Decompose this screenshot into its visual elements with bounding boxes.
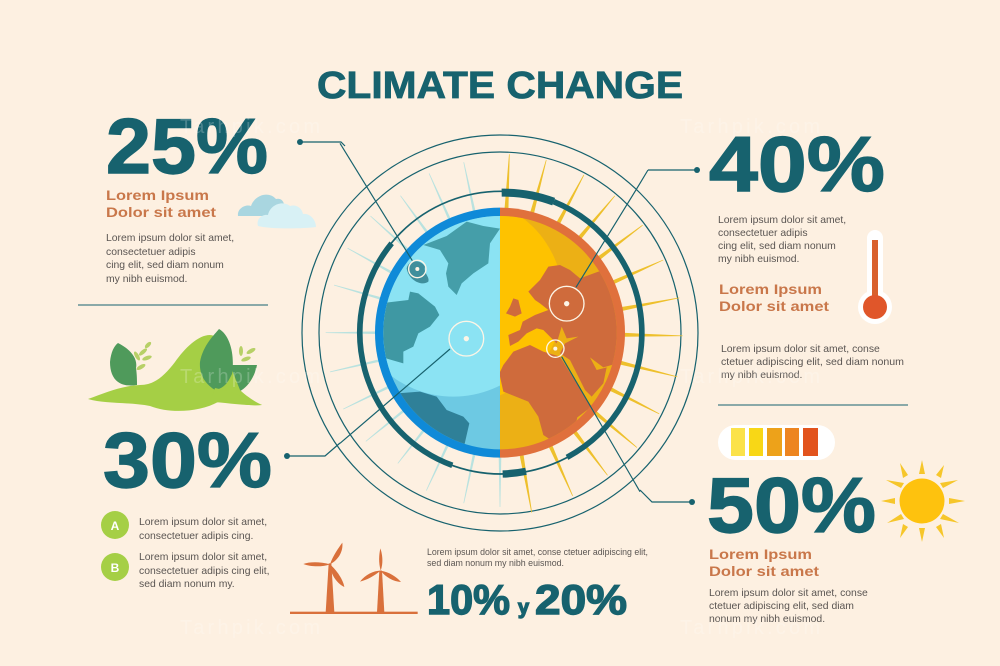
stat 10% y 20% block xyxy=(427,546,648,623)
stat 50% block: Lorem Ipsum xyxy=(709,546,812,562)
globe hot half xyxy=(500,208,625,458)
leader 30% xyxy=(287,443,340,456)
leader 40% xyxy=(648,169,697,171)
stat 25% block: Lorem ipsum dolor sit amet, xyxy=(106,233,234,244)
stat 50% block: 50% xyxy=(707,461,876,549)
stat 40% block: my nibh euismod. xyxy=(721,370,802,381)
stat 40% block: Lorem ipsum dolor sit amet, xyxy=(718,215,846,226)
stat 40% block: 40% xyxy=(709,120,885,208)
cold side rays xyxy=(326,162,501,507)
icon: hill with leaves xyxy=(88,329,262,411)
watermarks xyxy=(180,116,820,639)
stat 50% block: nonum my nibh euismod. xyxy=(709,614,825,625)
stat 25% block: my nibh euismod. xyxy=(106,274,187,285)
icon: clouds xyxy=(238,195,316,228)
stat 40% block: cing elit, sed diam nonum xyxy=(718,241,836,252)
leader 25% xyxy=(300,142,345,146)
stat 30% block: A xyxy=(111,519,120,533)
leader dot 25% xyxy=(297,139,303,145)
globe graphic with rings and rays xyxy=(302,135,698,531)
segmented ring xyxy=(359,191,642,474)
stat 10% y 20% block: sed diam nonum my nibh euismod. xyxy=(427,557,564,568)
icon: thermometer xyxy=(858,230,892,324)
stat 30% block: 30% xyxy=(103,416,272,504)
stat 10% y 20% block: 20% xyxy=(535,576,627,623)
leader dot 40% xyxy=(694,167,700,173)
stat 10% y 20% block: y xyxy=(518,597,530,619)
leader 50% xyxy=(640,490,692,502)
stat 50% block: Lorem ipsum dolor sit amet, conse xyxy=(709,588,868,599)
globe cold half xyxy=(375,208,500,458)
hill xyxy=(88,335,262,411)
watermarks: Tarhpik.com xyxy=(680,116,820,138)
sprigs xyxy=(133,341,256,371)
stat 25% block: cing elit, sed diam nonum xyxy=(106,260,224,271)
stat 50% block xyxy=(707,461,876,625)
stat 30% block: Lorem ipsum dolor sit amet, xyxy=(139,517,267,528)
icon: sun xyxy=(881,460,965,542)
stat 40% block: Lorem Ipsum xyxy=(719,281,822,297)
stat 30% block: consectetuer adipis cing. xyxy=(139,531,253,542)
leaf right back xyxy=(225,365,257,393)
leaf left xyxy=(110,343,137,386)
hot side rays xyxy=(504,154,683,513)
stat 25% block xyxy=(106,102,268,285)
leaf right front xyxy=(200,329,233,390)
stat 40% block: consectetuer adipis xyxy=(718,228,808,239)
stat 10% y 20% block: Lorem ipsum dolor sit amet, conse ctetuer adipiscing elit, xyxy=(427,546,648,557)
stat 30% block: B xyxy=(111,561,120,575)
leader dot 50% xyxy=(689,499,695,505)
stat 30% block xyxy=(101,416,272,590)
stat 50% block: ctetuer adipiscing elit, sed diam xyxy=(709,601,854,612)
target markers xyxy=(409,260,584,357)
stat 40% block: Dolor sit amet xyxy=(719,298,829,314)
title: CLIMATE CHANGE xyxy=(317,65,683,107)
watermarks: Tarhpik.com xyxy=(680,617,820,639)
watermarks: Tarhpik.com xyxy=(680,366,820,388)
stat 30% block: Lorem ipsum dolor sit amet, xyxy=(139,552,267,563)
divider left xyxy=(78,304,268,306)
watermarks: Tarhpik.com xyxy=(180,366,320,388)
stat 25% block: Dolor sit amet xyxy=(106,204,216,220)
watermarks: Tarhpik.com xyxy=(180,617,320,639)
stat 40% block: my nibh euismod. xyxy=(718,254,799,265)
leader lines inside globe xyxy=(340,143,648,492)
stat 30% block: consectetuer adipis cing elit, xyxy=(139,566,270,577)
stat 25% block: consectetuer adipis xyxy=(106,247,196,258)
leader dot 30% xyxy=(284,453,290,459)
icon: heat gauge xyxy=(718,425,835,460)
stat 30% block: sed diam nonum my. xyxy=(139,579,235,590)
stat 40% block: Lorem ipsum dolor sit amet, conse xyxy=(721,344,880,355)
icon: wind turbines xyxy=(290,543,418,614)
divider right xyxy=(718,404,908,406)
stat 50% block: Dolor sit amet xyxy=(709,563,819,579)
stat 40% block: ctetuer adipiscing elit, sed diam nonum xyxy=(721,357,904,368)
stat 25% block: Lorem Ipsum xyxy=(106,187,209,203)
stat 10% y 20% block: 10% xyxy=(427,576,510,623)
watermarks: Tarhpik.com xyxy=(180,116,320,138)
stat 40% block xyxy=(709,120,904,381)
stat 25% block: 25% xyxy=(106,102,268,190)
